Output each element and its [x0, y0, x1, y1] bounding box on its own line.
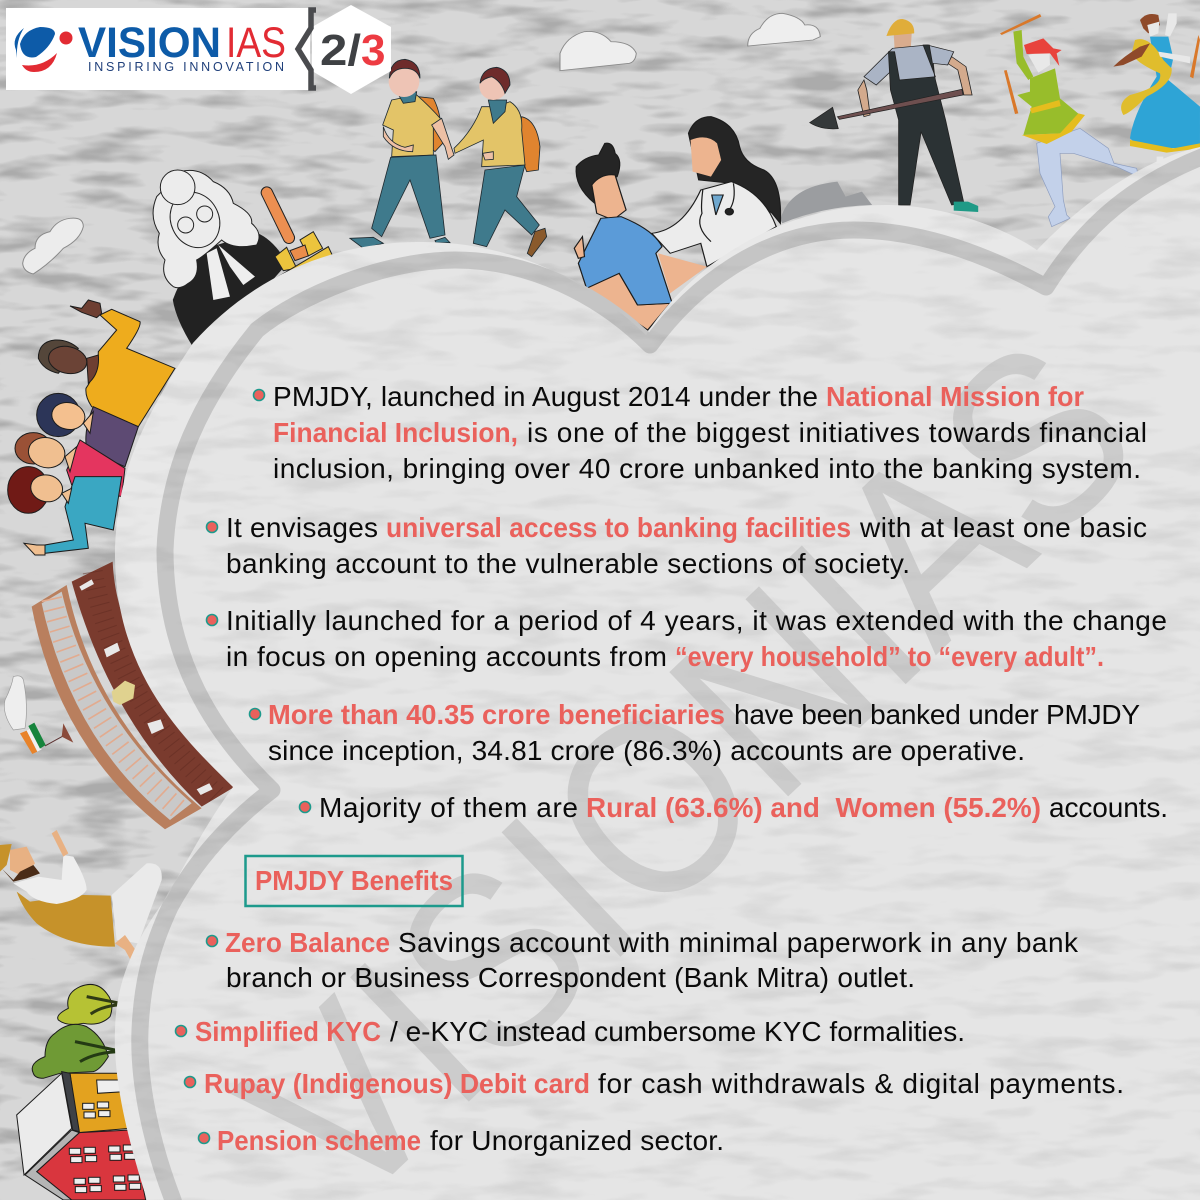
text block: pension: [217, 1125, 724, 1156]
figure: construction worker with shovel: [810, 19, 978, 212]
helmet: [886, 19, 914, 36]
counter numbers: [320, 26, 385, 75]
tie and stethoscope: [700, 183, 734, 242]
hexagon counter: [312, 5, 391, 94]
female dancer: [1113, 13, 1200, 168]
student right: [454, 67, 547, 257]
text block: launch: is one of the biggest initiatives towards financial: [527, 417, 1147, 448]
text block: extension: Initially launched for a period of 4 years, it was extended with the change: [226, 605, 1167, 636]
text block: Rupay: for cash withdrawals & digital payments.: [598, 1068, 1124, 1099]
text block: pension: Pension scheme: [217, 1125, 421, 1156]
figure: parliament building with flag: [4, 562, 235, 829]
text block: KYC: / e-KYC instead cumbersome KYC formalities.: [390, 1016, 965, 1047]
doctor hair: [689, 117, 781, 223]
person in purple: [37, 393, 138, 467]
text block: launch: National Mission for: [826, 381, 1084, 412]
text block: universal access: It envisages: [226, 512, 378, 543]
text block: launch: PMJDY, launched in August 2014 under the: [273, 381, 818, 412]
tie: [207, 248, 230, 300]
figure: two students holding hands: [350, 59, 547, 257]
dark tree: [32, 1024, 108, 1078]
heading: PMJDY Benefits: PMJDY Benefits: [255, 865, 453, 896]
text block: zero balance: branch or Business Correspondent (Bank Mitra) outlet.: [226, 962, 915, 993]
logo: Vision IAS: IAS: [226, 19, 286, 67]
arms and face: [858, 80, 870, 117]
text block: majority: [319, 792, 1168, 823]
logo: Vision IAS: [6, 5, 391, 94]
gavel: [259, 185, 333, 293]
person in yellow: [38, 300, 175, 427]
text block: universal access: with at least one basic: [859, 512, 1147, 543]
text block: beneficiaries: have been banked under PMJDY: [734, 699, 1140, 730]
light tree: [58, 984, 112, 1024]
person in pink: [15, 433, 125, 497]
wig: [153, 170, 259, 288]
wordmark: VISION: [78, 19, 221, 67]
figure: judge with gavel: [153, 170, 333, 347]
text block: launch: Financial Inclusion,: [273, 417, 518, 448]
face: [161, 184, 229, 256]
figure: trees and houses: [17, 984, 146, 1200]
emblem: [112, 681, 135, 705]
text block: zero balance: [225, 927, 1079, 993]
icon: two clouds top: [560, 13, 820, 71]
figure: doctor with patient: [574, 117, 872, 332]
flag pole and flag: [4, 676, 73, 754]
windows: [79, 579, 213, 795]
figure: group of four people: [8, 300, 175, 555]
counter numbers: 3: [361, 26, 385, 75]
doctor coat: [652, 182, 776, 267]
person in blue: [8, 467, 122, 555]
student left: [350, 59, 454, 248]
logo panel: [6, 8, 310, 90]
text block: KYC: Simplified KYC: [195, 1016, 381, 1047]
tagline: INSPIRING INNOVATION: [88, 60, 284, 74]
text block: Rupay: Rupay (Indigenous) Debit card: [204, 1068, 590, 1099]
text block: extension: [226, 605, 1167, 672]
rock: [780, 182, 872, 223]
heading: PMJDY Benefits: [246, 856, 462, 906]
patient arm: [587, 273, 670, 330]
text block: majority: Majority of them are: [319, 792, 578, 823]
white roof: [17, 1073, 72, 1175]
shoe: [954, 202, 978, 212]
text block: beneficiaries: More than 40.35 crore beneficiaries: [268, 699, 725, 730]
red house: [37, 1130, 146, 1200]
colonnade: [32, 585, 202, 829]
patient face: [592, 175, 626, 220]
yellow house: [70, 1073, 131, 1133]
text block: majority: Rural (63.6%) and Women (55.2%): [586, 792, 1041, 823]
text block: Rupay: [204, 1068, 1124, 1099]
text block: universal access: [226, 512, 1147, 579]
bullets: [176, 390, 310, 1144]
icon: small cloud left: [23, 218, 83, 274]
text block: extension: “every household” to “every adult”.: [675, 641, 1104, 672]
patient shirt: [578, 217, 672, 305]
shirt: [864, 45, 954, 87]
text block: universal access: banking account to the vulnerable sections of society.: [226, 548, 910, 579]
doctor face: [691, 137, 721, 177]
patient hair: [576, 143, 620, 203]
text block: beneficiaries: [268, 699, 1140, 766]
text block: pension: for Unorganized sector.: [430, 1125, 724, 1156]
text block: extension: in focus on opening accounts from: [226, 641, 667, 672]
panel: cloud shape with ring: [114, 147, 1200, 1200]
counter numbers: 2/: [320, 26, 361, 75]
text block: majority: accounts.: [1049, 792, 1168, 823]
text block: beneficiaries: since inception, 34.81 crore (86.3%) accounts are operative.: [268, 735, 1025, 766]
text block: zero balance: Zero Balance: [225, 927, 390, 958]
figure: man with turban: [0, 830, 162, 965]
text block: universal access: universal access to banking facilities: [386, 512, 851, 543]
globe mark: [15, 27, 72, 72]
text block: zero balance: Savings account with minimal paperwork in any bank: [398, 927, 1079, 958]
text block: launch: [273, 381, 1147, 484]
figure: dandiya dancers: [1000, 13, 1200, 227]
robe: [173, 233, 287, 347]
male dancer: [1000, 14, 1138, 227]
roof: [72, 562, 235, 807]
shovel: [837, 89, 963, 119]
overalls: [888, 45, 964, 205]
text block: launch: inclusion, bringing over 40 crore unbanked into the banking system.: [273, 453, 1141, 484]
bracket: [298, 10, 316, 88]
